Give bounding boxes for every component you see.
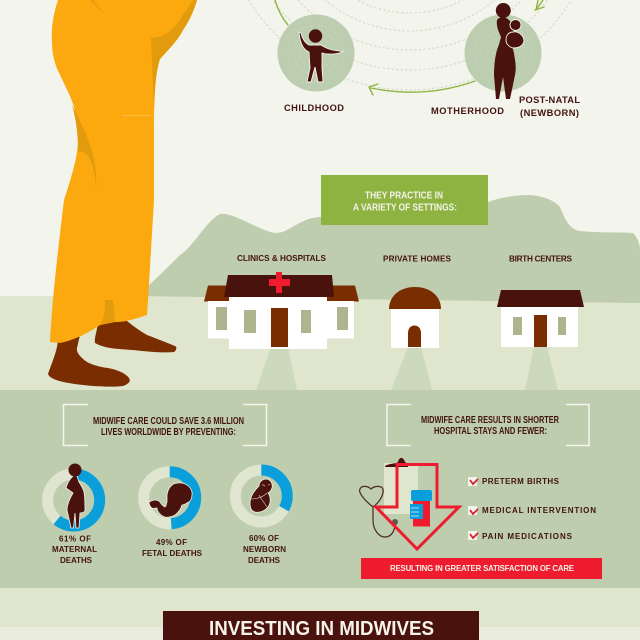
icon: private home — [389, 287, 441, 348]
icon: clipboard, stethoscope, medicine and down arrow — [360, 458, 459, 549]
label: post-natal — [519, 95, 580, 118]
dress — [50, 0, 197, 343]
icon: birth center — [497, 290, 584, 347]
label: private homes: PRIVATE HOMES — [383, 254, 452, 264]
check: preterm births: PRETERM BIRTHS — [482, 477, 560, 486]
label: post-natal: (NEWBORN) — [520, 108, 579, 118]
callout: settings heading — [321, 175, 488, 225]
donut: maternal deaths 61% — [48, 464, 100, 528]
label: 49% of fetal deaths: 49% OF — [156, 538, 187, 547]
label: 60% of newborn deaths: NEWBORN — [243, 545, 286, 554]
feet — [48, 321, 176, 387]
dotted life-cycle rings — [220, 0, 600, 90]
panel: midwife care background — [0, 390, 640, 588]
label: 61% of maternal deaths: MATERNAL — [52, 545, 97, 554]
callout: settings heading: THEY PRACTICE IN — [365, 190, 443, 202]
background hills — [130, 195, 640, 303]
lower ground strip — [0, 627, 640, 640]
arrows of life cycle — [275, 0, 544, 95]
label: 49% of fetal deaths: FETAL DEATHS — [142, 549, 203, 558]
panel: lives saved — [48, 404, 287, 565]
section heading: investing in midwives: INVESTING IN MIDWIVES — [209, 618, 434, 640]
label: 61% of maternal deaths — [52, 534, 97, 565]
callout: greater satisfaction: RESULTING IN GREATER SATISFACTION OF CARE — [390, 564, 574, 573]
donut: fetal deaths 49% — [144, 472, 196, 524]
bracket heading: lives saved — [64, 404, 266, 446]
woman figure in orange dress — [48, 0, 197, 387]
bracket heading: shorter stays: MIDWIFE CARE RESULTS IN SHORTER — [421, 415, 559, 426]
label: post-natal: POST-NATAL — [519, 95, 580, 105]
dress shadows — [151, 0, 197, 110]
checklist — [468, 477, 596, 541]
section heading: investing in midwives — [163, 611, 479, 640]
label: 60% of newborn deaths: DEATHS — [248, 556, 281, 565]
label: 61% of maternal deaths: 61% OF — [59, 534, 91, 544]
bracket heading: shorter stays: HOSPITAL STAYS AND FEWER: — [434, 426, 547, 437]
label: 60% of newborn deaths — [243, 534, 286, 565]
label: 49% of fetal deaths — [142, 538, 203, 558]
label: 61% of maternal deaths: DEATHS — [60, 556, 93, 565]
callout: greater satisfaction — [361, 558, 602, 579]
check: medical intervention: MEDICAL INTERVENTION — [482, 506, 596, 515]
label: motherhood: MOTHERHOOD — [431, 106, 504, 116]
icon: childhood — [278, 14, 354, 92]
label: childhood: CHILDHOOD — [284, 103, 344, 113]
label: 60% of newborn deaths: 60% OF — [249, 534, 279, 543]
icon: motherhood — [464, 3, 542, 99]
callout: settings heading: A VARIETY OF SETTINGS: — [353, 202, 457, 214]
label: clinics and hospitals: CLINICS & HOSPITALS — [237, 254, 327, 263]
bracket heading: lives saved: MIDWIFE CARE COULD SAVE 3.6 MILLION — [93, 416, 244, 427]
icon: hospital — [204, 272, 359, 349]
check: pain medications: PAIN MEDICATIONS — [482, 532, 573, 541]
label: birth centers: BIRTH CENTERS — [509, 254, 573, 264]
bracket heading: shorter stays — [387, 404, 589, 446]
footpaths — [256, 347, 558, 390]
panel: shorter stays — [360, 404, 602, 579]
donut: newborn deaths 60% — [235, 470, 287, 522]
bracket heading: lives saved: LIVES WORLDWIDE BY PREVENTING: — [101, 427, 236, 438]
ground — [0, 296, 640, 640]
